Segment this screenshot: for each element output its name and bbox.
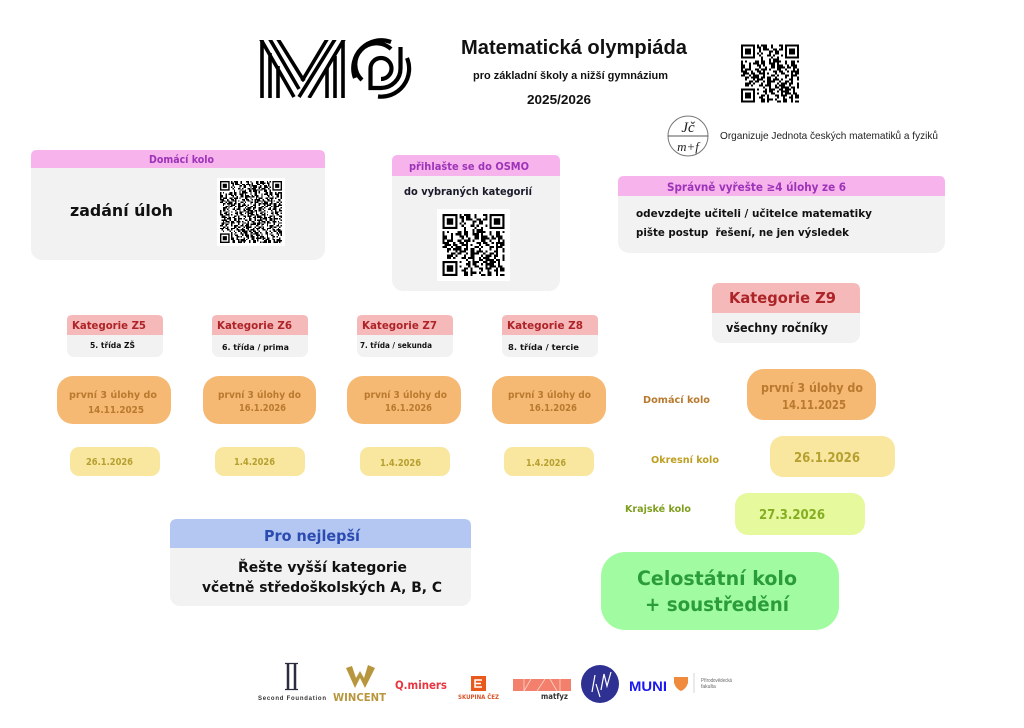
panel: Kategorie Z5: 5. třída ZŠ xyxy=(90,341,135,350)
panel: přihlaste se do OSMO xyxy=(392,155,560,291)
panel: Kategorie Z7 xyxy=(357,315,453,357)
panel: Domácí kolo: Domácí kolo xyxy=(149,154,214,166)
panel: Správně vyřešte: Správně vyřešte ≥4 úlohy ze 6 xyxy=(667,180,846,194)
date: Z7 okresní kolo xyxy=(360,447,450,476)
date: Z9 krajské kolo: 27.3.2026 xyxy=(759,507,825,523)
panel: Kategorie Z6 xyxy=(212,315,308,357)
panel: Kategorie Z6: Kategorie Z6 xyxy=(217,319,292,332)
sponsor: MUNI: MUNI xyxy=(629,678,667,694)
date: Z8 domácí kolo xyxy=(492,376,606,424)
icon: JČMF logo xyxy=(668,116,708,156)
date: Z7 domácí kolo xyxy=(347,376,461,424)
sponsor: Wincent: WINCENT xyxy=(333,692,387,704)
panel: Kategorie Z9: Kategorie Z9 xyxy=(729,289,836,307)
panel: Správně vyřešte: odevzdejte učiteli / učitelce matematiky xyxy=(636,207,872,220)
panel: Kategorie Z5 xyxy=(67,315,163,357)
panel: Správně vyřešte: pište postup řešení, ne jen výsledek xyxy=(636,226,850,239)
sponsor: Přírodovědecká fakulta xyxy=(674,673,732,693)
QR code: header xyxy=(741,44,799,102)
date: Z5 okresní kolo: 26.1.2026 xyxy=(86,457,133,468)
date: Z7 domácí kolo: první 3 úlohy do xyxy=(364,389,447,401)
date: Z6 domácí kolo: první 3 úlohy do xyxy=(218,389,301,401)
sponsor: Wincent xyxy=(333,665,387,704)
panel: Kategorie Z8: Kategorie Z8 xyxy=(507,319,583,332)
panel: Pro nejlepší: včetně středoškolských A, B, C xyxy=(202,580,442,596)
date: Z9 okresní kolo xyxy=(770,436,895,477)
date: Z9 okresní kolo: 26.1.2026 xyxy=(794,450,860,466)
date: Z8 domácí kolo: 16.1.2026 xyxy=(529,403,577,414)
date: Z5 domácí kolo xyxy=(57,376,171,424)
date: Z7 domácí kolo: 16.1.2026 xyxy=(385,403,432,414)
label: Krajské kolo: Krajské kolo xyxy=(625,503,691,515)
icon: JČMF logo: m+f xyxy=(677,139,701,154)
subtitle: pro základní školy a nižší gymnázium xyxy=(473,70,668,82)
date: Z5 okresní kolo xyxy=(70,447,160,476)
sponsor: Skupina ČEZ: SKUPINA ČEZ xyxy=(458,694,500,701)
panel: přihlaste se do OSMO: do vybraných kategorií xyxy=(404,186,533,198)
panel: Kategorie Z9: všechny ročníky xyxy=(726,321,828,335)
date: Z8 okresní kolo: 1.4.2026 xyxy=(526,458,566,469)
panel: Pro nejlepší: Pro nejlepší xyxy=(264,527,361,545)
date: Z8 okresní kolo xyxy=(504,447,594,476)
date: Z6 domácí kolo xyxy=(203,376,316,424)
sponsor: matfyz xyxy=(513,679,571,701)
sponsor: Skupina ČEZ xyxy=(458,676,500,701)
panel: Pro nejlepší: Řešte vyšší kategorie xyxy=(238,559,407,576)
icon: JČMF logo: Jč xyxy=(681,120,696,136)
date: Z9 domácí kolo: první 3 úlohy do xyxy=(761,381,863,395)
panel: Kategorie Z6: 6. třída / prima xyxy=(222,343,289,352)
sponsor: Qminers: Q.miners xyxy=(395,678,447,692)
QR code: OSMO xyxy=(437,209,510,281)
logo: MO xyxy=(259,36,409,98)
panel: Pro nejlepší xyxy=(170,519,471,606)
school year: 2025/2026 xyxy=(527,92,591,107)
panel: Kategorie Z8 xyxy=(502,315,598,357)
panel: Domácí kolo: zadání úloh xyxy=(70,201,173,220)
sponsor: MFF circle logo xyxy=(581,665,619,703)
sponsor: Second Foundation: Second Foundation xyxy=(258,696,326,702)
panel: Celostátní kolo: Celostátní kolo xyxy=(637,567,797,590)
date: Z8 domácí kolo: první 3 úlohy do xyxy=(508,389,591,401)
panel: Kategorie Z7: Kategorie Z7 xyxy=(362,319,437,332)
label: Domácí kolo: Domácí kolo xyxy=(643,394,710,406)
date: Z9 domácí kolo xyxy=(747,369,876,420)
date: Z5 domácí kolo: 14.11.2025 xyxy=(88,405,144,416)
sponsor: matfyz: matfyz xyxy=(541,692,568,701)
date: Z9 krajské kolo xyxy=(735,493,865,535)
panel: Kategorie Z9 xyxy=(712,283,860,343)
date: Z5 domácí kolo: první 3 úlohy do xyxy=(69,389,157,401)
date: Z9 domácí kolo: 14.11.2025 xyxy=(782,398,846,412)
sponsor: Přírodovědecká fakulta: fakulta xyxy=(701,684,716,690)
panel: Celostátní kolo xyxy=(601,552,839,630)
title: Matematická olympiáda xyxy=(461,37,688,59)
label: Okresní kolo: Okresní kolo xyxy=(651,454,719,466)
panel: Kategorie Z8: 8. třída / tercie xyxy=(508,343,579,352)
panel: Kategorie Z5: Kategorie Z5 xyxy=(72,319,146,332)
date: Z6 okresní kolo xyxy=(215,447,305,476)
panel: Celostátní kolo: + soustředění xyxy=(645,593,790,616)
sponsor: Second Foundation xyxy=(258,663,326,702)
panel: Kategorie Z7: 7. třída / sekunda xyxy=(360,341,432,350)
date: Z6 okresní kolo: 1.4.2026 xyxy=(234,457,275,468)
date: Z7 okresní kolo: 1.4.2026 xyxy=(380,458,421,469)
date: Z6 domácí kolo: 16.1.2026 xyxy=(239,403,286,414)
sponsor: Přírodovědecká fakulta: Přírodovědecká xyxy=(701,678,732,684)
panel: Správně vyřešte xyxy=(618,176,945,253)
QR code: zadání xyxy=(217,178,285,246)
panel: Domácí kolo xyxy=(31,150,325,260)
panel: přihlaste se do OSMO: přihlašte se do OSMO xyxy=(409,161,529,173)
organizer text: Organizuje Jednota českých matematiků a fyziků xyxy=(720,130,938,142)
